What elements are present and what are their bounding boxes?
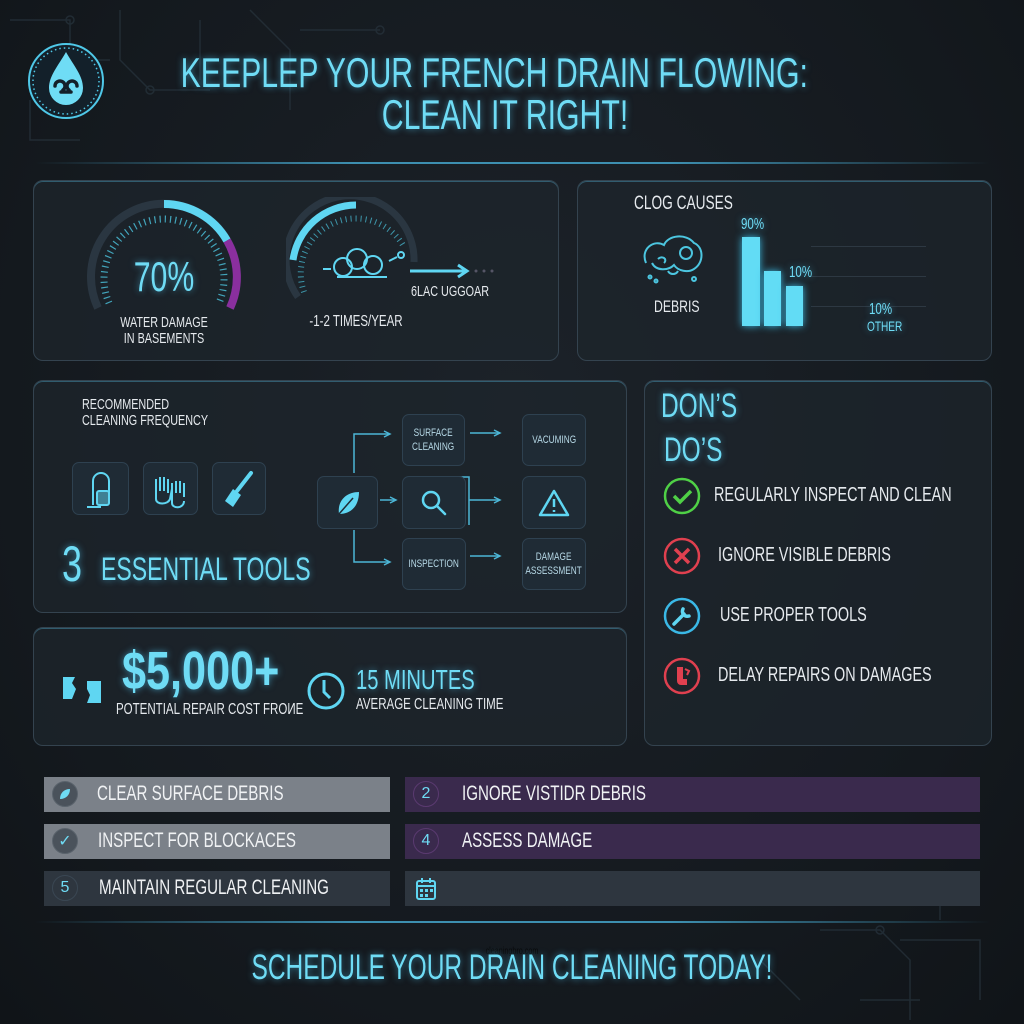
flow diagram: INSPECTION xyxy=(409,558,459,570)
checklist rows xyxy=(44,777,980,906)
panel: clog causes: CLOG CAUSES xyxy=(634,193,733,214)
panel: stats gauges xyxy=(33,180,559,361)
icon: debris xyxy=(644,235,702,284)
panel: tools and process: CLEANING FREQUENCY xyxy=(82,412,208,429)
row: ignore debris: IGNORE VISTIDR DEBRIS xyxy=(462,782,646,805)
row: clear surface debris: CLEAR SURFACE DEBRIS xyxy=(97,782,284,805)
panel: tools and process: ESSENTIAL TOOLS xyxy=(101,551,311,587)
row: inspect xyxy=(44,824,390,859)
icon: vacuum xyxy=(72,462,129,515)
flow diagram: ASSESSMENT xyxy=(526,565,582,577)
flow diagram: CLEANING xyxy=(412,441,455,453)
row: assess damage: 4 xyxy=(422,832,430,849)
panel: cost and time: $5,000+ xyxy=(122,641,279,701)
item: regularly inspect: REGULARLY INSPECT AND CLEAN xyxy=(714,484,952,506)
flow diagram xyxy=(317,414,586,590)
footer call to action: SCHEDULE YOUR DRAIN CLEANING TODAY! xyxy=(252,948,772,987)
panel: stats gauges: 6LAC UGGOAR xyxy=(411,283,489,300)
panel: cost and time xyxy=(33,627,627,746)
bar chart: 10% xyxy=(869,301,892,318)
bar chart: OTHER xyxy=(867,318,902,334)
panel: do's and don'ts xyxy=(644,380,992,746)
panel: do's and don'ts: DON’S xyxy=(661,387,737,425)
item: proper tools xyxy=(664,598,867,634)
item: proper tools: USE PROPER TOOLS xyxy=(720,604,867,626)
row: calendar xyxy=(405,871,980,906)
icon: magnifier xyxy=(402,476,466,529)
panel: cost and time: 15 MINUTES xyxy=(356,664,475,695)
row: clear surface debris xyxy=(44,777,390,812)
row: maintain: 5 xyxy=(61,879,69,896)
stat: 3 essential tools: 3 xyxy=(62,536,82,592)
bar chart: 10% xyxy=(789,264,812,281)
panel: do's and don'ts: DO’S xyxy=(664,431,722,469)
flow diagram: VACUMING xyxy=(532,434,576,446)
gauge: 70% water damage xyxy=(87,200,241,310)
title: KEEPLEP YOUR FRENCH DRAIN FLOWING: xyxy=(181,49,808,96)
icon: warning xyxy=(522,476,586,529)
item: delay repairs xyxy=(664,658,932,694)
arrow xyxy=(410,264,494,278)
panel: tools and process: RECOMMENDED xyxy=(82,396,169,413)
row: ignore debris: 2 xyxy=(422,785,430,802)
panel: cost and time: AVERAGE CLEANING TIME xyxy=(356,696,503,713)
flow diagram: DAMAGE xyxy=(536,551,572,563)
panel: cost and time: POTENTIAL REPAIR COST FROИE xyxy=(116,701,303,718)
title: CLEAN IT RIGHT! xyxy=(382,91,628,138)
panel: clog causes xyxy=(577,180,992,361)
icon: broken pipe xyxy=(63,677,101,703)
icon: cloud xyxy=(323,248,405,278)
row: assess damage: ASSESS DAMAGE xyxy=(462,829,592,852)
item: regularly inspect xyxy=(664,478,952,514)
bar chart xyxy=(736,216,926,334)
panel: stats gauges: WATER DAMAGE xyxy=(120,314,208,331)
icon: leaf xyxy=(317,476,378,529)
row: ignore debris xyxy=(405,777,980,812)
icon: water drop logo xyxy=(28,43,104,119)
gauge: cleaning frequency xyxy=(286,197,418,299)
bar chart: 90% xyxy=(741,216,764,233)
row: inspect: ✓ xyxy=(58,833,72,850)
panel: stats gauges: -1-2 TIMES/YEAR xyxy=(309,313,403,330)
icon: gloves xyxy=(143,462,198,515)
title xyxy=(178,49,808,138)
item: ignore debris xyxy=(664,538,891,574)
item: ignore debris: IGNORE VISIBLE DEBRIS xyxy=(718,544,891,566)
panel: clog causes: DEBRIS xyxy=(654,297,700,316)
icon: clock xyxy=(308,672,344,710)
panel: stats gauges: 70% xyxy=(134,253,194,300)
row: maintain xyxy=(44,871,390,906)
panel: tools and process xyxy=(33,380,627,613)
row: assess damage xyxy=(405,824,980,859)
flow diagram: SURFACE xyxy=(414,427,453,439)
row: inspect: INSPECT FOR BLOCKACES xyxy=(98,829,296,852)
row: maintain: MAINTAIN REGULAR CLEANING xyxy=(99,876,329,899)
icon: brush xyxy=(212,462,266,515)
watermark: cleaningbro.com xyxy=(486,946,538,957)
panel: stats gauges: IN BASEMENTS xyxy=(124,330,204,347)
item: delay repairs: DELAY REPAIRS ON DAMAGES xyxy=(718,664,932,686)
